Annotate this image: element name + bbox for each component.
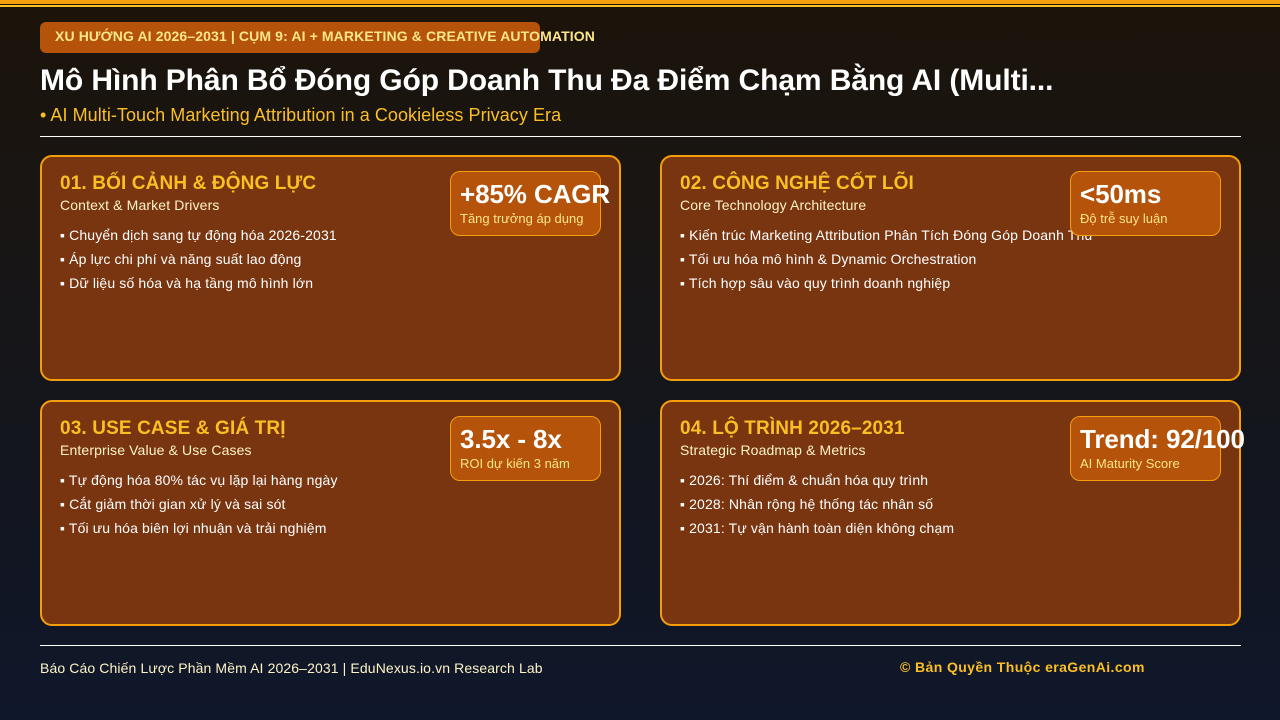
subtitle: • AI Multi-Touch Marketing Attribution in a Cookieless Privacy Era bbox=[40, 105, 561, 125]
metric chip bbox=[450, 171, 601, 236]
metric chip: +85% CAGR bbox=[460, 179, 610, 209]
panel heading: 03. USE CASE & GIÁ TRỊ bbox=[60, 418, 286, 439]
bullet list bbox=[680, 227, 1092, 291]
metric chip: AI Maturity Score bbox=[1080, 456, 1180, 471]
panel heading: 01. BỐI CẢNH & ĐỘNG LỰC bbox=[60, 173, 316, 194]
bullet list bbox=[60, 227, 337, 291]
bullet list: ▪ 2028: Nhân rộng hệ thống tác nhân số bbox=[680, 496, 933, 512]
panel: context and drivers bbox=[40, 155, 621, 381]
bullet list: ▪ Chuyển dịch sang tự động hóa 2026-2031 bbox=[60, 227, 337, 243]
metric chip bbox=[1070, 171, 1221, 236]
panel: use cases and value bbox=[40, 400, 621, 626]
footer source: Báo Cáo Chiến Lược Phần Mềm AI 2026–2031 | EduNexus.io.vn Research Lab bbox=[40, 660, 543, 676]
panel subheading: Core Technology Architecture bbox=[680, 197, 866, 213]
panel heading: 02. CÔNG NGHỆ CỐT LÕI bbox=[680, 173, 914, 194]
panel: core technology bbox=[660, 155, 1241, 381]
metric chip: Độ trễ suy luận bbox=[1080, 211, 1167, 226]
metric chip: ROI dự kiến 3 năm bbox=[460, 456, 570, 471]
bullet list: ▪ Tích hợp sâu vào quy trình doanh nghiệp bbox=[680, 275, 950, 291]
panel subheading: Strategic Roadmap & Metrics bbox=[680, 442, 866, 458]
footer copyright: © Bản Quyền Thuộc eraGenAi.com bbox=[900, 659, 1145, 675]
category badge bbox=[40, 22, 540, 53]
badge text: XU HƯỚNG AI 2026–2031 | CỤM 9: AI + MARKETING & CREATIVE AUTOMATION bbox=[55, 28, 595, 44]
panel subheading: Enterprise Value & Use Cases bbox=[60, 442, 252, 458]
metric chip: <50ms bbox=[1080, 179, 1161, 209]
metric chip: Trend: 92/100 bbox=[1080, 424, 1245, 454]
bullet list: ▪ 2031: Tự vận hành toàn diện không chạm bbox=[680, 520, 954, 536]
panel: roadmap bbox=[660, 400, 1241, 626]
bullet list bbox=[60, 472, 338, 536]
bullet list bbox=[680, 472, 954, 536]
metric chip bbox=[450, 416, 601, 481]
metric chip bbox=[1070, 416, 1221, 481]
bullet list: ▪ Áp lực chi phí và năng suất lao động bbox=[60, 251, 301, 267]
metric chip: 3.5x - 8x bbox=[460, 424, 562, 454]
bullet list: ▪ Tối ưu hóa biên lợi nhuận và trải nghiệm bbox=[60, 520, 327, 536]
top accent bar bbox=[0, 0, 1280, 7]
panel subheading: Context & Market Drivers bbox=[60, 197, 220, 213]
bullet list: ▪ Tự động hóa 80% tác vụ lặp lại hàng ngày bbox=[60, 472, 338, 488]
title: Mô Hình Phân Bổ Đóng Góp Doanh Thu Đa Điểm Chạm Bằng AI (Multi... bbox=[40, 64, 1053, 97]
panel heading: 04. LỘ TRÌNH 2026–2031 bbox=[680, 418, 905, 439]
bullet list: ▪ 2026: Thí điểm & chuẩn hóa quy trình bbox=[680, 472, 928, 488]
bullet list: ▪ Kiến trúc Marketing Attribution Phân Tích Đóng Góp Doanh Thu bbox=[680, 227, 1092, 243]
bullet list: ▪ Dữ liệu số hóa và hạ tầng mô hình lớn bbox=[60, 275, 313, 291]
bullet list: ▪ Tối ưu hóa mô hình & Dynamic Orchestration bbox=[680, 251, 976, 267]
bullet list: ▪ Cắt giảm thời gian xử lý và sai sót bbox=[60, 496, 286, 512]
metric chip: Tăng trưởng áp dụng bbox=[460, 211, 583, 226]
